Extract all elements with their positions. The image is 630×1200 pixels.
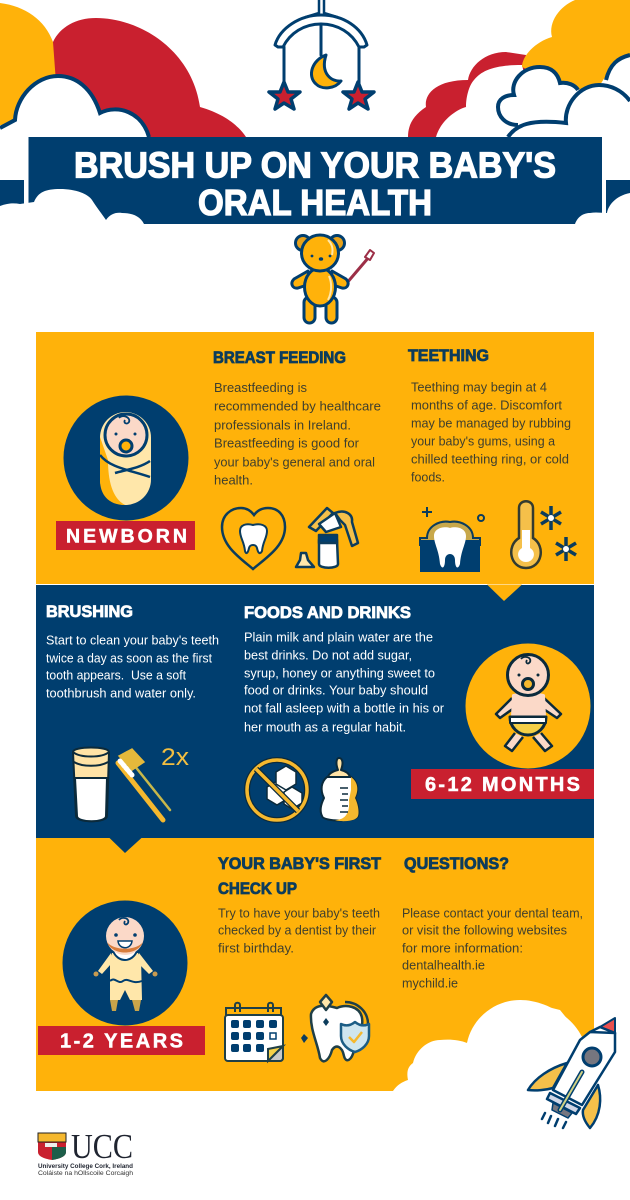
section: breast feeding: professionals in Ireland.	[214, 418, 351, 432]
label: 6-12 months	[411, 769, 594, 799]
label: newborn: NEWBORN	[66, 526, 187, 548]
icon: shiny tooth with shield	[301, 995, 369, 1061]
section: teething: TEETHING	[408, 347, 489, 365]
icon: baby bottle	[321, 758, 359, 821]
arrow: notch	[109, 838, 142, 853]
icon: calendar	[225, 1003, 283, 1061]
section: brushing: twice a day as soon as the first	[46, 650, 212, 666]
section: questions	[402, 855, 583, 990]
section: foods and drinks	[244, 604, 445, 734]
section: teething: months of age. Discomfort	[411, 398, 562, 412]
panel: 6-12 months	[36, 584, 594, 838]
icon: rocket	[528, 1018, 615, 1128]
logo: UCC	[38, 1127, 133, 1177]
section: teething: your baby's gums, using a	[411, 434, 556, 448]
section: brushing: tooth appears. Use a soft	[46, 668, 186, 682]
icon: glass of water	[73, 748, 109, 821]
section: foods and drinks: FOODS AND DRINKS	[244, 604, 411, 622]
1-2 years circle	[62, 900, 188, 1026]
section: foods and drinks: food or drinks. Your baby should	[244, 682, 428, 698]
panel: 1-2 years	[36, 838, 594, 1091]
section: questions: Please contact your dental team,	[402, 906, 583, 920]
icon: toothbrush	[118, 749, 170, 820]
icon: baby in nappy	[496, 654, 561, 751]
section: foods and drinks: not fall asleep with a bottle in his or	[244, 700, 445, 716]
section: foods and drinks: syrup, honey or anything sweet to	[244, 666, 435, 680]
section: breast feeding: your baby's general and oral	[214, 454, 375, 470]
label: 1-2 years	[38, 1026, 205, 1055]
section: brushing: Start to clean your baby's teeth	[46, 632, 219, 648]
clouds: top right	[408, 0, 630, 140]
section: foods and drinks: her mouth as a regular habit.	[244, 720, 406, 734]
section: questions: or visit the following websites	[402, 922, 567, 938]
section: questions: for more information:	[402, 940, 523, 956]
section: first check up: CHECK UP	[218, 880, 297, 898]
icon: teddy bear with toothbrush	[292, 235, 374, 323]
section: teething: foods.	[411, 470, 445, 484]
section: questions: mychild.ie	[402, 976, 458, 990]
section: teething: Teething may begin at 4	[411, 380, 547, 394]
section: first check up	[218, 855, 381, 956]
section: foods and drinks: Plain milk and plain water are the	[244, 630, 433, 644]
section: teething: chilled teething ring, or cold	[411, 452, 569, 466]
text: 2x: 2x	[161, 744, 189, 771]
label: newborn	[56, 521, 195, 550]
title banner: ORAL HEALTH	[198, 182, 432, 223]
icon: no sugar	[247, 760, 307, 820]
newborn circle	[64, 396, 188, 520]
section: brushing	[46, 603, 219, 700]
section: breast feeding: Breastfeeding is good for	[214, 436, 360, 450]
section: breast feeding: recommended by healthcare	[214, 398, 381, 414]
logo: UCC: University College Cork, Ireland	[38, 1163, 133, 1170]
title banner	[0, 137, 630, 232]
section: first check up: YOUR BABY'S FIRST	[218, 855, 381, 873]
label: 6-12 months: 6-12 MONTHS	[425, 774, 580, 796]
section: first check up: first birthday.	[218, 940, 294, 956]
section: breast feeding: health.	[214, 472, 253, 488]
icon: thermometer and snowflakes	[511, 501, 576, 568]
section: breast feeding	[213, 349, 381, 488]
title banner: BRUSH UP ON YOUR BABY'S	[74, 144, 556, 186]
section: teething: may be managed by rubbing	[411, 416, 571, 430]
logo: UCC: Coláiste na hOllscoile Corcaigh	[38, 1170, 133, 1177]
icon: moon	[311, 55, 341, 88]
icon: tooth in gum	[420, 507, 484, 572]
panel: newborn	[36, 332, 594, 584]
section: teething	[408, 347, 571, 484]
icon: toddler	[94, 917, 158, 1011]
white cloud over panel	[393, 1000, 594, 1095]
logo: UCC: UCC	[71, 1127, 133, 1166]
icon: heart with tooth	[222, 508, 285, 569]
icon: breast pump and bottle	[296, 508, 358, 568]
icon: right star	[343, 82, 374, 109]
6-12 months circle	[466, 644, 590, 768]
section: first check up: checked by a dentist by their	[218, 922, 377, 938]
icon: swaddled baby	[100, 412, 151, 505]
arrow: notch	[487, 584, 522, 601]
section: brushing: BRUSHING	[46, 603, 133, 621]
section: questions: dentalhealth.ie	[402, 958, 485, 972]
section: questions: QUESTIONS?	[404, 855, 509, 873]
section: breast feeding: Breastfeeding is	[214, 380, 307, 395]
hanging baby mobile	[269, 0, 374, 109]
crest	[38, 1133, 66, 1160]
label: 1-2 years: 1-2 YEARS	[60, 1030, 183, 1052]
section: breast feeding: BREAST FEEDING	[213, 349, 346, 367]
section: foods and drinks: best drinks. Do not add sugar,	[244, 648, 412, 662]
section: first check up: Try to have your baby's teeth	[218, 906, 380, 920]
icon: left star	[269, 82, 300, 109]
clouds: top left	[0, 3, 246, 180]
section: brushing: toothbrush and water only.	[46, 686, 196, 700]
